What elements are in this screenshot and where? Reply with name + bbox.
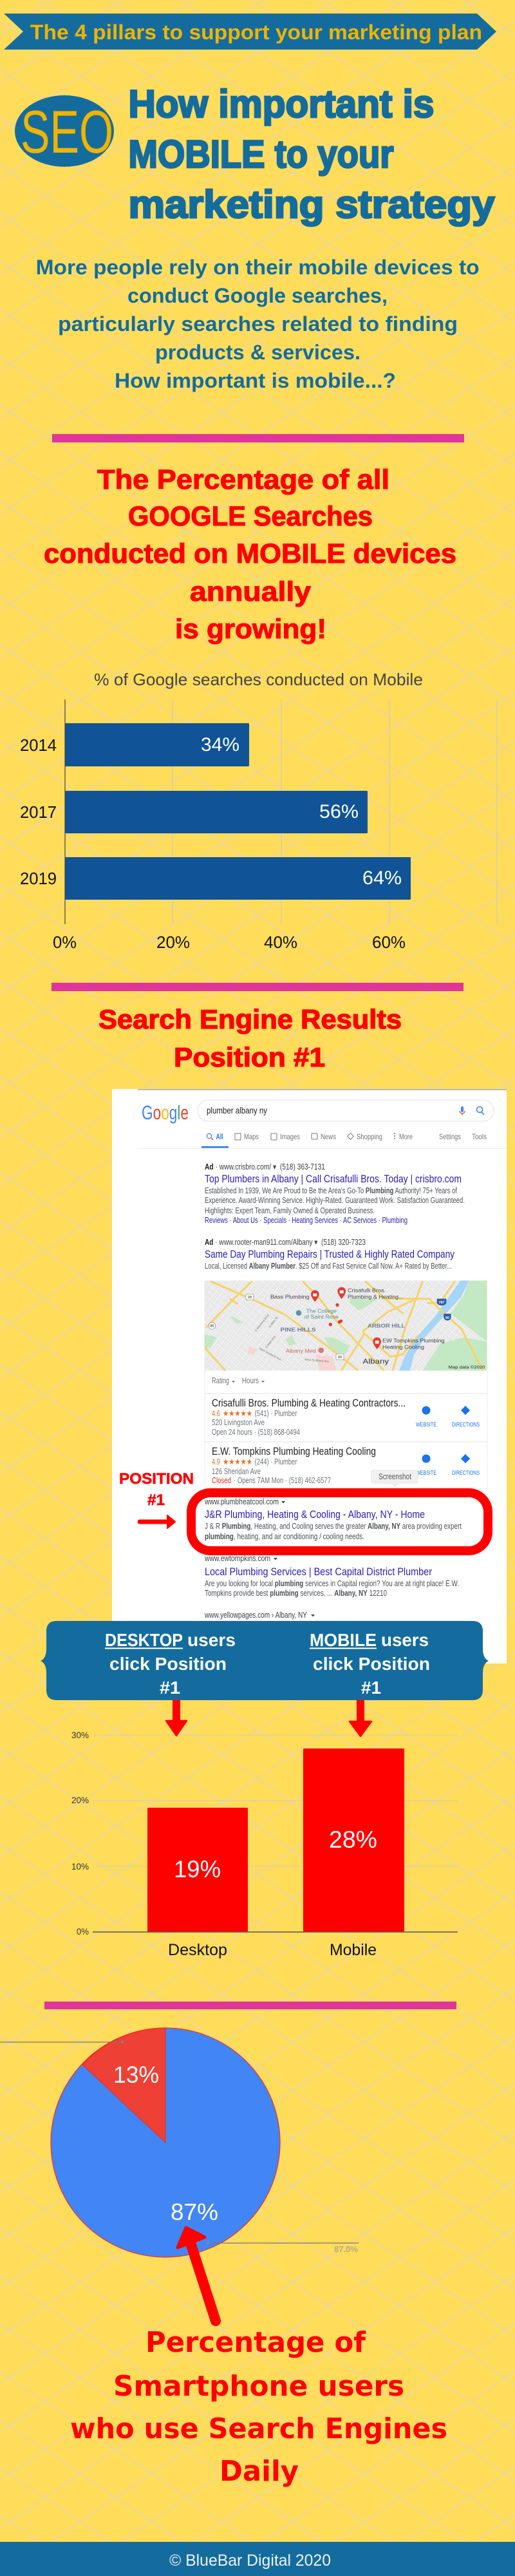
map labels: Plumbing & Heating... [348,1294,404,1300]
map labels: Albany [362,1358,389,1365]
local listing 2: · Opens 7AM Mon · (518) 462-6577 [234,1476,331,1485]
pie chart: smartphone users using search engines daily: 13% [113,2061,159,2088]
ad result 1: Established In 1939, We Are Proud to Be the Area's Go-To Plumbing Authority! 75+ Years of [205,1186,457,1195]
heading: percentage of smartphone users: who use Search Engines [70,2412,447,2445]
title: MOBILE to your [129,133,394,176]
arrow: pointing to 87 percent [178,2228,216,2321]
column chart: position 1 clicks, desktop vs mobile: 20% [71,1795,89,1805]
heading: percentage of Google searches on mobile: is growing! [175,614,326,645]
callout: red highlight around position 1 result [191,1493,488,1551]
map labels: New Scotland Ave [259,1347,282,1361]
organic result 3: www.yellowpages.com › Albany, NY [204,1611,308,1620]
local listing 1: ★★★★★ [223,1409,252,1418]
ad result 1: Highlights: Expert Team, Family Owned & Operated Business. [205,1206,375,1215]
map labels [254,1287,485,1370]
highway shields: 787 [439,1301,444,1305]
heading: percentage of smartphone users: Smartphone users [113,2370,404,2403]
heading: percentage of smartphone users: Daily [220,2455,299,2488]
bar chart: % of Google searches conducted on mobile: 2019 [20,869,57,888]
ad result 1 [205,1162,465,1225]
callout: desktop and mobile users click position 1: DESKTOP [105,1630,183,1650]
local listing 1: 4.6 [212,1409,220,1418]
intro text block: More people rely on their mobile devices to [36,256,480,279]
bar chart: % of Google searches conducted on mobile: % of Google searches conducted on Mobile [94,670,423,689]
icon: SEO logo oval [15,95,114,167]
ad result 2: Same Day Plumbing Repairs | Trusted & Highly Rated Company [205,1248,454,1260]
intro text block: products & services. [155,341,360,364]
highway shields [209,1294,451,1360]
callout: desktop and mobile users click position 1: #1 [160,1678,180,1698]
local listing 1: (541) · Plumber [255,1409,297,1418]
highway shields: 90 [445,1316,449,1320]
search tabs: Shopping [357,1132,382,1141]
ad result 2 [205,1238,454,1271]
map labels: Albany Med [286,1348,316,1354]
callout: desktop and mobile users click position 1: users [381,1630,429,1650]
ad result 2: Local, Licensed Albany Plumber. $25 Off and Fast Service Call Now. A+ Rated by Better... [205,1262,452,1271]
Google logo: Google [142,1101,189,1124]
callout: desktop and mobile users click position 1: users [187,1630,236,1650]
ad result 2: Ad · www.rooter-man911.com/Albany ▾ (518) 320-7323 [205,1238,366,1247]
pie chart: smartphone users using search engines daily: 87% [171,2199,218,2225]
intro text block [36,256,480,392]
callout: desktop and mobile users click position 1: click Position [109,1654,227,1674]
bar chart: % of Google searches conducted on mobile: 64% [362,867,402,889]
bar chart: % of Google searches conducted on mobile: 40% [264,933,297,952]
bar chart: % of Google searches conducted on mobile: 60% [372,933,406,952]
map labels: of Saint Rose [304,1314,339,1320]
callout: desktop and mobile users click position 1: #1 [361,1678,381,1698]
arrow: desktop callout to bar [166,1700,187,1736]
organic result 2: Local Plumbing Services | Best Capital District Plumber [205,1566,432,1578]
local listing 2: E.W. Tompkins Plumbing Heating Cooling [212,1446,376,1457]
column chart: position 1 clicks, desktop vs mobile: 19% [174,1856,221,1882]
organic result 2: www.ewtompkins.com [204,1554,270,1563]
heading: search engine results position 1: Position #1 [174,1042,325,1072]
heading: percentage of Google searches on mobile: annually [190,576,311,607]
pie chart: smartphone users using search engines daily: 87.0% [334,2244,358,2254]
local filters: Rating [212,1376,229,1385]
search box: plumber albany ny [207,1106,267,1115]
local listing 1: DIRECTIONS [452,1421,480,1428]
column chart: position 1 clicks, desktop vs mobile: 10% [71,1861,89,1871]
ad result 1: Ad · www.crisbro.com/ ▾ (518) 363-7131 [205,1162,325,1171]
organic result 1: J&R Plumbing, Heating & Cooling - Albany, NY - Home [205,1508,425,1520]
search tabs: News [321,1132,336,1141]
local listing 2: DIRECTIONS [452,1470,480,1477]
heading: percentage of smartphone users: Percentage of [145,2326,366,2359]
pie chart: smartphone users using search engines daily [0,2028,359,2257]
search tabs: All [216,1132,223,1141]
highway shields: 85 [210,1325,214,1329]
heading: percentage of Google searches on mobile: GOOGLE Searches [128,501,373,532]
label: position 1 with arrow: #1 [147,1492,165,1509]
organic result 2: Tompkins provide best plumbing services. ... Albany, NY 12210 [205,1589,387,1598]
local listing 2: Closed [212,1476,231,1485]
heading: percentage of smartphone users [70,2326,447,2488]
local listing 1: 520 Livingston Ave [212,1418,265,1427]
map labels: Crisafulli Bros. [348,1287,386,1294]
map labels: Heating Cooling [382,1343,424,1350]
search tabs: Images [280,1132,300,1141]
search tabs: More [399,1132,413,1141]
local listing 1: Open 24 hours · (518) 868-0494 [212,1428,300,1437]
highway shields: 20 [338,1356,342,1359]
top ribbon banner [4,14,496,50]
callout: desktop and mobile users click position 1 [41,1621,489,1700]
search box [198,1100,494,1121]
local listing 2 [212,1446,480,1485]
footer [0,2542,515,2576]
ad result 1: Reviews · About Us · Specials · Heating Services · AC Services · Plumbing [205,1215,407,1225]
panel: Google search screenshot [112,1089,507,1663]
highway shields: 20 [248,1296,252,1300]
bar chart: % of Google searches conducted on mobile: 56% [319,801,359,822]
screenshot tooltip [371,1470,418,1486]
map of Albany [204,1280,487,1370]
local listing 1: Crisafulli Bros. Plumbing & Heating Contractors... [212,1397,406,1409]
local listing 2: ★★★★★ [223,1457,252,1466]
title [129,82,495,226]
bar chart: % of Google searches conducted on mobile: 20% [156,933,190,952]
intro text block: conduct Google searches, [127,284,388,307]
organic result 2 [204,1554,459,1598]
bar chart: % of Google searches conducted on mobile: 34% [201,734,239,755]
local listing 1 [212,1397,480,1437]
column chart: position 1 clicks, desktop vs mobile [71,1730,458,1959]
heading: percentage of Google searches on mobile [44,464,456,645]
column chart: position 1 clicks, desktop vs mobile: Desktop [168,1941,227,1959]
local listing 1: WEBSITE [416,1421,436,1428]
column chart: position 1 clicks, desktop vs mobile: 28% [329,1826,377,1853]
footer: © BlueBar Digital 2020 [169,2552,331,2570]
bar chart: % of Google searches conducted on mobile: 0% [53,933,77,952]
intro text block: particularly searches related to finding [58,312,458,336]
map labels: PINE HILLS [281,1327,316,1333]
icon: SEO logo oval: SEO [21,98,113,166]
map labels: S Main Ave [265,1335,276,1349]
local listing 2: 4.9 [212,1457,220,1466]
column chart: position 1 clicks, desktop vs mobile: 0% [77,1926,89,1937]
map labels: New Scotland Ave [304,1358,330,1363]
search tabs: Maps [244,1132,259,1141]
heading: search engine results position 1 [98,1004,402,1072]
title: How important is [129,82,434,126]
search tabs: Tools [472,1132,487,1141]
local listing 2: WEBSITE [416,1470,436,1477]
intro text block: How important is mobile...? [115,369,396,392]
local filters: Hours [242,1376,259,1385]
local filters [212,1376,265,1385]
bar chart: % of Google searches conducted on mobile: 2017 [20,802,57,822]
bar chart: % of Google searches conducted on mobile: 2014 [20,735,57,755]
screenshot tooltip: Screenshot [379,1472,411,1481]
label: position 1 with arrow: POSITION [119,1470,194,1488]
organic result 1: J & R Plumbing, Heating, and Cooling serves the greater Albany, NY area providing expert [205,1522,462,1531]
arrow: mobile callout to bar [350,1700,371,1736]
map labels: EW Tompkins Plumbing [382,1337,445,1343]
map pins [296,1287,381,1353]
title: marketing strategy [129,183,495,226]
map labels: Bass Plumbing [270,1294,310,1300]
map labels: S Allen St [268,1316,279,1329]
map labels: The College [306,1308,337,1314]
heading: percentage of Google searches on mobile: conducted on MOBILE devices [44,538,456,569]
ad result 1: Top Plumbers in Albany | Call Crisafulli Bros. Today | crisbro.com [205,1173,462,1185]
organic result 1: www.plumbheatcool.com [204,1497,279,1506]
map labels: ARBOR HILL [368,1323,405,1329]
bar chart: % of Google searches conducted on mobile [20,670,497,952]
heading: search engine results position 1: Search Engine Results [98,1004,402,1034]
column chart: position 1 clicks, desktop vs mobile: 30% [71,1730,89,1740]
organic result 2: Are you looking for local plumbing services in Capital region? You are at right place! E.W. [205,1579,459,1588]
search tabs: Settings [439,1132,461,1141]
top ribbon banner: The 4 pillars to support your marketing plan [30,21,482,44]
organic result 1 [204,1497,462,1541]
column chart: position 1 clicks, desktop vs mobile: Mobile [330,1941,377,1959]
search tabs [207,1132,487,1141]
label: position 1 with arrow [119,1470,194,1528]
callout: desktop and mobile users click position 1: MOBILE [310,1630,377,1650]
local listing 2: (244) · Plumber [255,1457,297,1466]
organic result 1: plumbing, heating, and air conditioning / cooling needs. [205,1532,364,1541]
map labels: Map data ©2020 [449,1365,485,1370]
map labels: S Manning Blvd [254,1314,270,1332]
callout: desktop and mobile users click position 1: click Position [313,1654,430,1674]
heading: percentage of Google searches on mobile: The Percentage of all [97,464,389,495]
local listing 2: 126 Sheridan Ave [212,1467,261,1476]
